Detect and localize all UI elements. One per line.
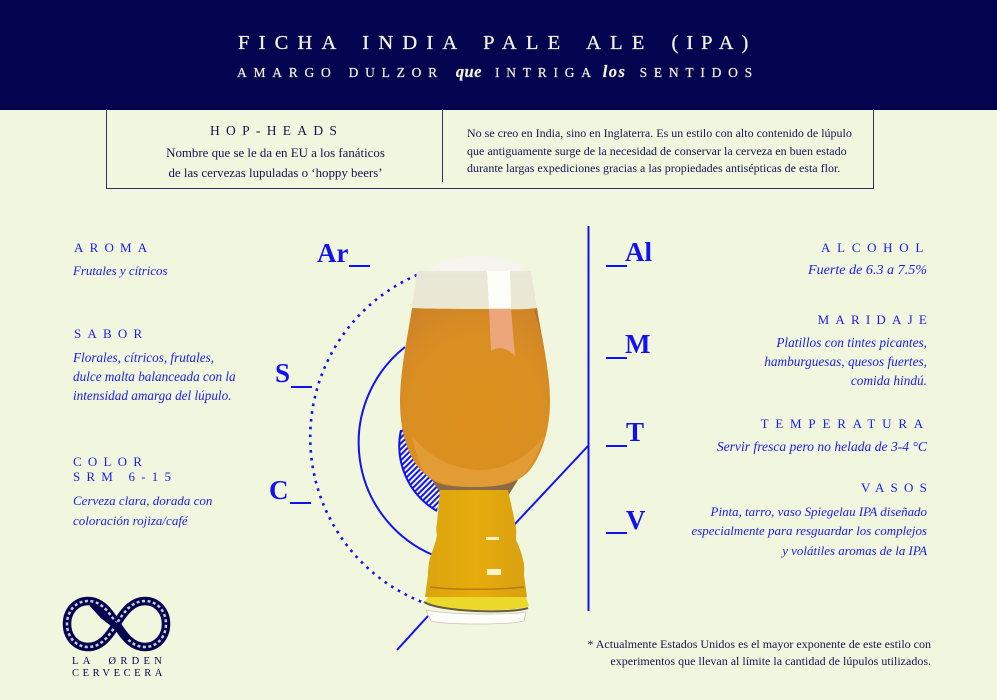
- lower bowl rim glow: [412, 436, 544, 487]
- label: V: V: [626, 505, 646, 535]
- text: vasos: Pinta, tarro, vaso Spiegelau IPA diseñado: [711, 504, 927, 518]
- text: color: Cerveza clara, dorada con: [73, 493, 212, 508]
- text: hop-heads definition: [166, 146, 385, 180]
- block: alcohol: [808, 240, 930, 278]
- text: maridaje: Platillos con tintes picantes,: [776, 334, 927, 350]
- logo text line 1: LA ØRDEN: [72, 656, 166, 667]
- text: color: coloración rojiza/café: [73, 512, 188, 528]
- stem highlights: [486, 537, 499, 540]
- stem shadow behind bowl: [432, 480, 518, 496]
- label: M: M: [625, 329, 650, 359]
- text: sabor: [72, 350, 236, 403]
- foam dome: [425, 256, 526, 272]
- underscore: M: [606, 357, 627, 359]
- footnote: experimentos que llevan al límite la cantidad de lúpulos utilizados.: [610, 654, 931, 668]
- heading: color: SRM 6-15: [73, 468, 177, 484]
- foam: [412, 271, 537, 309]
- footnote: * Actualmente Estados Unidos es el mayor exponente de este estilo con: [587, 637, 931, 651]
- header band: [0, 0, 997, 110]
- text: origin: que antiguamente surge de la necesidad de conservar la cerveza en buen estado: [467, 144, 847, 158]
- diagonal line: base: [397, 616, 428, 650]
- text: origin: durante largas expediciones gracias a las propiedades antisépticas de esta flor.: [467, 161, 840, 175]
- heading: hop-heads: HOP-HEADS: [210, 123, 343, 138]
- text: sabor: intensidad amarga del lúpulo.: [73, 388, 232, 403]
- text: maridaje: hamburguesas, quesos fuertes,: [764, 354, 927, 369]
- heading: color: [73, 454, 177, 484]
- block: maridaje: [764, 312, 933, 388]
- text: hop-heads definition: de las cervezas lupuladas o ‘hoppy beers’: [168, 166, 383, 180]
- subtitle: AMARGO DULZOR que INTRIGA los SENTIDOS: [237, 62, 759, 81]
- text: maridaje: [764, 334, 927, 388]
- underscore: T: [606, 445, 627, 447]
- text: aroma: Frutales y cítricos: [73, 264, 168, 278]
- beer glass: [400, 256, 550, 624]
- dotted arc: aroma: [310, 275, 422, 602]
- text: origin: [467, 126, 852, 175]
- block: temperatura: [717, 416, 930, 454]
- hatched semicircle: [399, 420, 445, 511]
- heading: color: COLOR: [73, 454, 148, 469]
- label: Al: Al: [625, 237, 652, 267]
- icon: ouroboros infinity: [62, 596, 170, 652]
- solid arc: sabor: [359, 347, 433, 555]
- text: hop-heads definition: Nombre que se le da en EU a los fanáticos: [166, 146, 385, 160]
- divider: [442, 109, 443, 182]
- logo text line 2: CERVECERA: [72, 668, 166, 679]
- underscore: Al: [606, 265, 627, 267]
- hatched semicircle outline: [399, 430, 437, 511]
- footnote: [587, 637, 931, 668]
- panel: intro box: [106, 109, 874, 189]
- heading: vasos: VASOS: [861, 480, 933, 495]
- bowl: [400, 308, 550, 487]
- heading: aroma: AROMA: [74, 240, 153, 255]
- block: sabor: [72, 326, 236, 403]
- text: color: [73, 493, 212, 528]
- text: maridaje: comida hindú.: [851, 373, 927, 388]
- text: vasos: y volátiles aromas de la IPA: [782, 542, 927, 558]
- heading: temperatura: TEMPERATURA: [761, 416, 930, 431]
- glass highlight: [487, 271, 511, 308]
- base: [425, 597, 529, 610]
- text: vasos: especialmente para resguardar los complejos: [692, 523, 927, 538]
- text: vasos: [692, 504, 928, 558]
- logo: la orden cervecera: [62, 596, 170, 679]
- underscore: V: [606, 532, 627, 534]
- text: sabor: Florales, cítricos, frutales,: [73, 350, 214, 364]
- diagonal line: vessel: [514, 446, 588, 525]
- title: FICHA INDIA PALE ALE (IPA): [238, 32, 756, 54]
- label: C: C: [269, 475, 288, 505]
- underscore: S: [291, 386, 312, 388]
- label: Ar: Ar: [317, 238, 348, 268]
- text: origin: No se creo en India, sino en Inglaterra. Es un estilo con alto contenido de lúpulo: [467, 126, 852, 140]
- block: color: [73, 454, 212, 528]
- label: T: T: [626, 417, 644, 447]
- vertical rule: [588, 226, 590, 611]
- text: temperatura: Servir fresca pero no helada de 3-4 °C: [717, 439, 927, 454]
- text: sabor: dulce malta balanceada con la: [73, 369, 236, 384]
- label: S: S: [275, 358, 290, 388]
- heading: sabor: SABOR: [74, 326, 148, 341]
- block: aroma: [72, 240, 168, 278]
- heading: alcohol: ALCOHOL: [821, 240, 930, 255]
- underscore: Ar: [349, 265, 370, 267]
- stem: [425, 490, 527, 597]
- underscore: C: [290, 502, 311, 504]
- right edge shadow: [534, 308, 550, 402]
- block: vasos: [692, 480, 933, 558]
- heading: maridaje: MARIDAJE: [818, 312, 933, 327]
- text: alcohol: Fuerte de 6.3 a 7.5%: [808, 262, 927, 278]
